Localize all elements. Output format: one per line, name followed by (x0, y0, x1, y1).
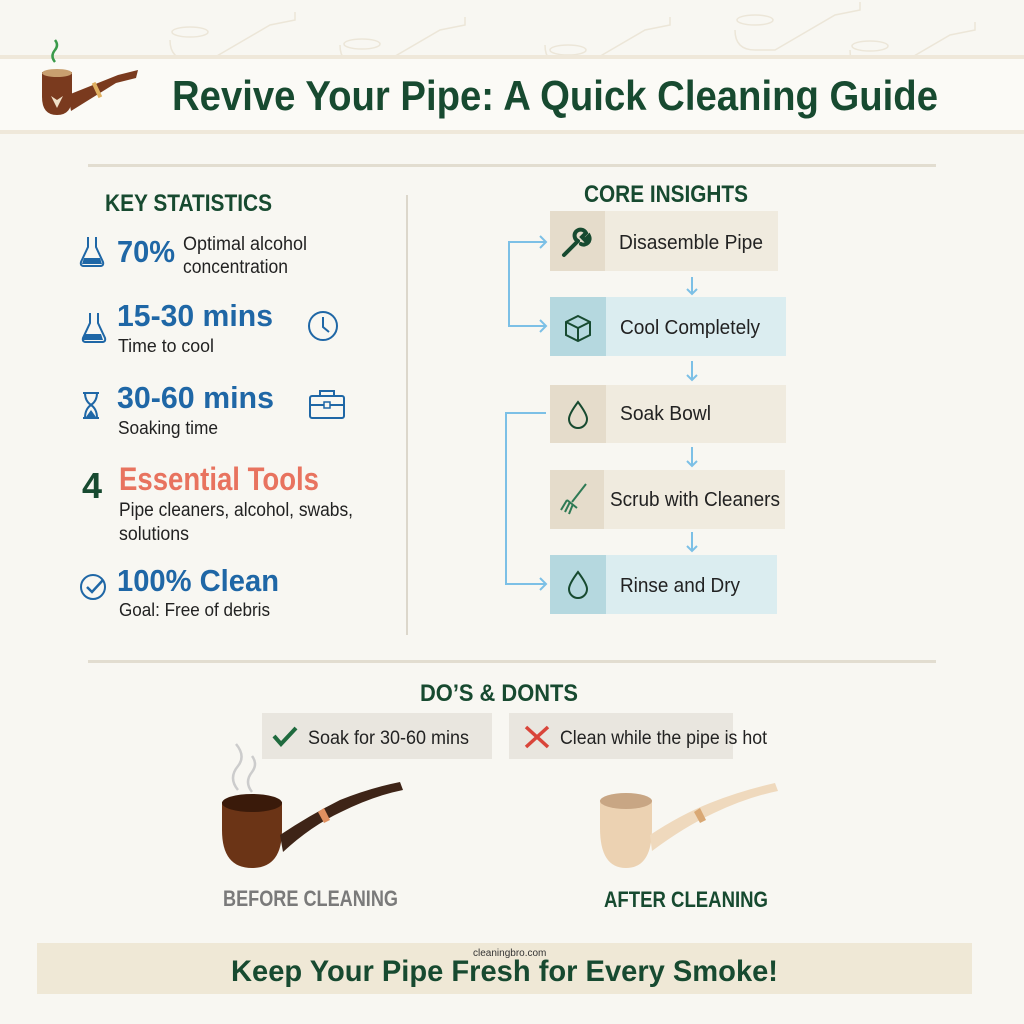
stat: 4 essential tools: 4 (82, 465, 102, 506)
panel: dos and donts (222, 680, 778, 912)
stat: 70% (81, 234, 307, 278)
stat: 30-60 mins (83, 380, 344, 438)
step: rinse: Rinse and Dry (620, 575, 740, 597)
panel: core insights (506, 181, 786, 614)
heading: dos and donts: DO’S & DONTS (420, 680, 578, 707)
stat: 15-30 mins (83, 298, 337, 356)
stat: 70%: concentration (183, 257, 288, 278)
step: disassemble: Disasemble Pipe (619, 232, 763, 254)
step: scrub (550, 470, 785, 529)
dont box (509, 713, 768, 759)
stat: 30-60 mins: Soaking time (118, 418, 218, 438)
label: before cleaning: BEFORE CLEANING (223, 886, 398, 911)
step: soak: Soak Bowl (620, 403, 711, 425)
panel: key statistics (81, 190, 353, 620)
footer banner: Keep Your Pipe Fresh for Every Smoke! (231, 955, 778, 988)
stat: 100% clean: 100% Clean (117, 563, 279, 598)
do box (262, 713, 492, 759)
arrows: flow (506, 236, 697, 590)
stat: 4 essential tools: Essential Tools (119, 461, 319, 497)
dont box: Clean while the pipe is hot (560, 728, 768, 749)
stat: 70%: 70% (117, 234, 175, 269)
heading: core insights: CORE INSIGHTS (584, 181, 748, 208)
step: scrub: Scrub with Cleaners (610, 489, 780, 511)
step: soak (550, 385, 786, 443)
stat: 4 essential tools: Pipe cleaners, alcohol, swabs, (119, 500, 353, 521)
step: disassemble (550, 211, 778, 271)
label: after cleaning: AFTER CLEANING (604, 887, 768, 912)
footer banner: cleaningbro.com (473, 948, 546, 959)
illustration: after pipe (600, 783, 778, 868)
stat: 15-30 mins: Time to cool (118, 336, 214, 356)
illustration: before pipe (222, 744, 403, 868)
stat: 100% clean (81, 563, 279, 620)
stat: 4 essential tools: solutions (119, 524, 189, 545)
title: Revive Your Pipe: A Quick Cleaning Guide (172, 72, 938, 119)
do box: Soak for 30-60 mins (308, 728, 469, 749)
stat: 30-60 mins: 30-60 mins (117, 380, 274, 415)
step: cool (550, 297, 786, 356)
stat: 4 essential tools (82, 461, 353, 545)
stat: 100% clean: Goal: Free of debris (119, 600, 270, 620)
step: cool: Cool Completely (620, 317, 760, 339)
stat: 70%: Optimal alcohol (183, 234, 307, 255)
footer banner (37, 943, 972, 994)
heading: key statistics: KEY STATISTICS (105, 190, 272, 217)
header band (0, 55, 1024, 134)
icon: header pipe (42, 40, 138, 115)
stat: 15-30 mins: 15-30 mins (117, 298, 273, 333)
step: rinse (550, 555, 777, 614)
